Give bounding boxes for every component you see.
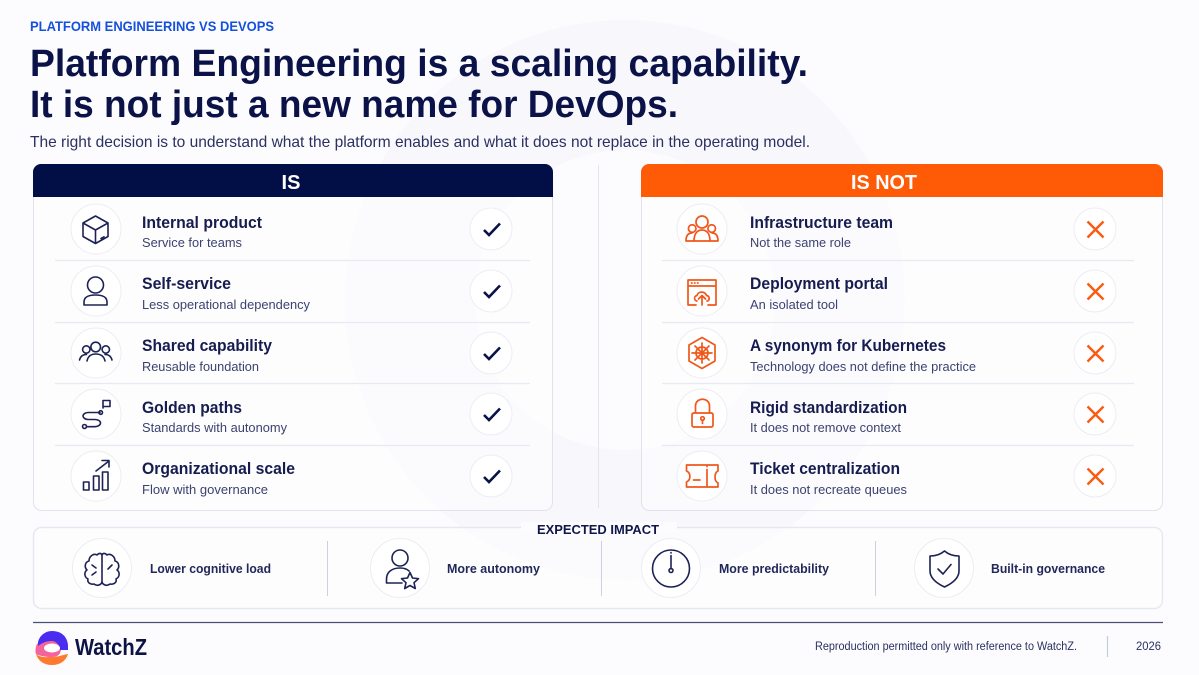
title: Platform Engineering is a scaling capability.: [30, 43, 808, 85]
logo mark: [35, 631, 68, 665]
IS NOT header: [641, 164, 1163, 197]
impact: More autonomy: [370, 538, 541, 598]
icon: infrastructure team: [686, 216, 718, 241]
row: Deployment portal: Deployment portal: [750, 274, 888, 293]
icon: cross: [1088, 284, 1104, 300]
row: A synonym for Kubernetes: A synonym for Kubernetes: [750, 336, 946, 355]
eyebrow: PLATFORM ENGINEERING VS DEVOPS: [30, 18, 274, 34]
subtitle: The right decision is to understand what the platform enables and what it does not replace in the operating model.: [30, 134, 810, 151]
row: Rigid standardization: [677, 389, 1116, 439]
icon: check: [484, 348, 500, 359]
icon: kubernetes wheel: [689, 338, 715, 368]
icon: growth bars: [84, 460, 109, 490]
icon: brain: [85, 553, 119, 585]
impact: Built-in governance: [914, 538, 1105, 598]
icon: ticket: [686, 465, 718, 487]
icon: cross: [1088, 346, 1104, 362]
title: [30, 43, 808, 126]
row: Golden paths: [71, 389, 512, 439]
impact: More predictability: [642, 538, 830, 598]
row: Self-service: Self-service: [142, 274, 231, 293]
row: Infrastructure team: Not the same role: [750, 235, 851, 250]
icon: lock: [692, 399, 713, 427]
icon: team: [80, 342, 112, 361]
panel: expected impact: [34, 522, 1162, 608]
row: Golden paths: Standards with autonomy: [142, 420, 287, 435]
panel: IS NOT: [641, 164, 1163, 510]
icon: check: [484, 470, 500, 482]
row: A synonym for Kubernetes: [677, 328, 1116, 378]
row: Rigid standardization: Rigid standardization: [750, 398, 907, 417]
impact: More autonomy: More autonomy: [447, 561, 541, 576]
IS header: IS: [282, 172, 300, 194]
row: Internal product: [71, 204, 512, 254]
row: Golden paths: Golden paths: [142, 398, 242, 417]
footer note: Reproduction permitted only with reference to WatchZ.: [815, 641, 1077, 653]
row: Deployment portal: An isolated tool: [750, 297, 838, 312]
row: Organizational scale: Organizational scale: [142, 459, 295, 478]
icon: path with flag: [82, 400, 110, 428]
row: Organizational scale: [71, 451, 512, 501]
row: Deployment portal: [677, 266, 1116, 316]
row: Rigid standardization: It does not remove context: [750, 420, 901, 435]
row: Shared capability: Reusable foundation: [142, 359, 259, 374]
icon: clock: [652, 550, 690, 587]
logo: WatchZ: WatchZ: [75, 634, 147, 660]
icon: check: [484, 408, 500, 420]
icon: person with star: [386, 550, 418, 588]
impact: Lower cognitive load: [72, 538, 271, 598]
row: Shared capability: Shared capability: [142, 336, 272, 355]
IS NOT header: IS NOT: [851, 172, 917, 194]
icon: person: [84, 277, 107, 305]
footer rule: [33, 622, 1163, 624]
icon: check: [484, 286, 500, 297]
row: Infrastructure team: [677, 204, 1116, 254]
row: Ticket centralization: It does not recreate queues: [750, 482, 907, 497]
footer year: 2026: [1136, 641, 1161, 653]
icon: shield check: [930, 551, 959, 587]
icon: check: [484, 224, 500, 235]
icon: cross: [1088, 222, 1104, 238]
icon: portal upload: [688, 280, 716, 305]
impact heading: EXPECTED IMPACT: [537, 522, 659, 537]
row: Organizational scale: Flow with governance: [142, 482, 268, 497]
panel: IS: [33, 164, 553, 510]
row: Infrastructure team: Infrastructure team: [750, 213, 893, 232]
impact: Lower cognitive load: Lower cognitive load: [150, 561, 271, 576]
row: Ticket centralization: Ticket centralization: [750, 459, 900, 478]
row: Self-service: Less operational dependency: [142, 297, 310, 312]
title: It is not just a new name for DevOps.: [30, 84, 678, 126]
impact: Built-in governance: Built-in governance: [991, 561, 1105, 576]
icon: cross: [1088, 468, 1104, 484]
row: Internal product: Internal product: [142, 213, 262, 232]
row: A synonym for Kubernetes: Technology does not define the practice: [750, 359, 976, 374]
center divider: [598, 165, 600, 508]
row: Ticket centralization: [677, 451, 1116, 501]
row: Shared capability: [71, 328, 512, 378]
IS header: [33, 164, 553, 197]
row: Self-service: [71, 266, 512, 316]
impact: More predictability: More predictability: [719, 561, 830, 576]
row: Internal product: Service for teams: [142, 235, 242, 250]
icon: cross: [1088, 406, 1104, 422]
logo: WatchZ: [35, 631, 147, 665]
icon: box: [83, 216, 108, 244]
